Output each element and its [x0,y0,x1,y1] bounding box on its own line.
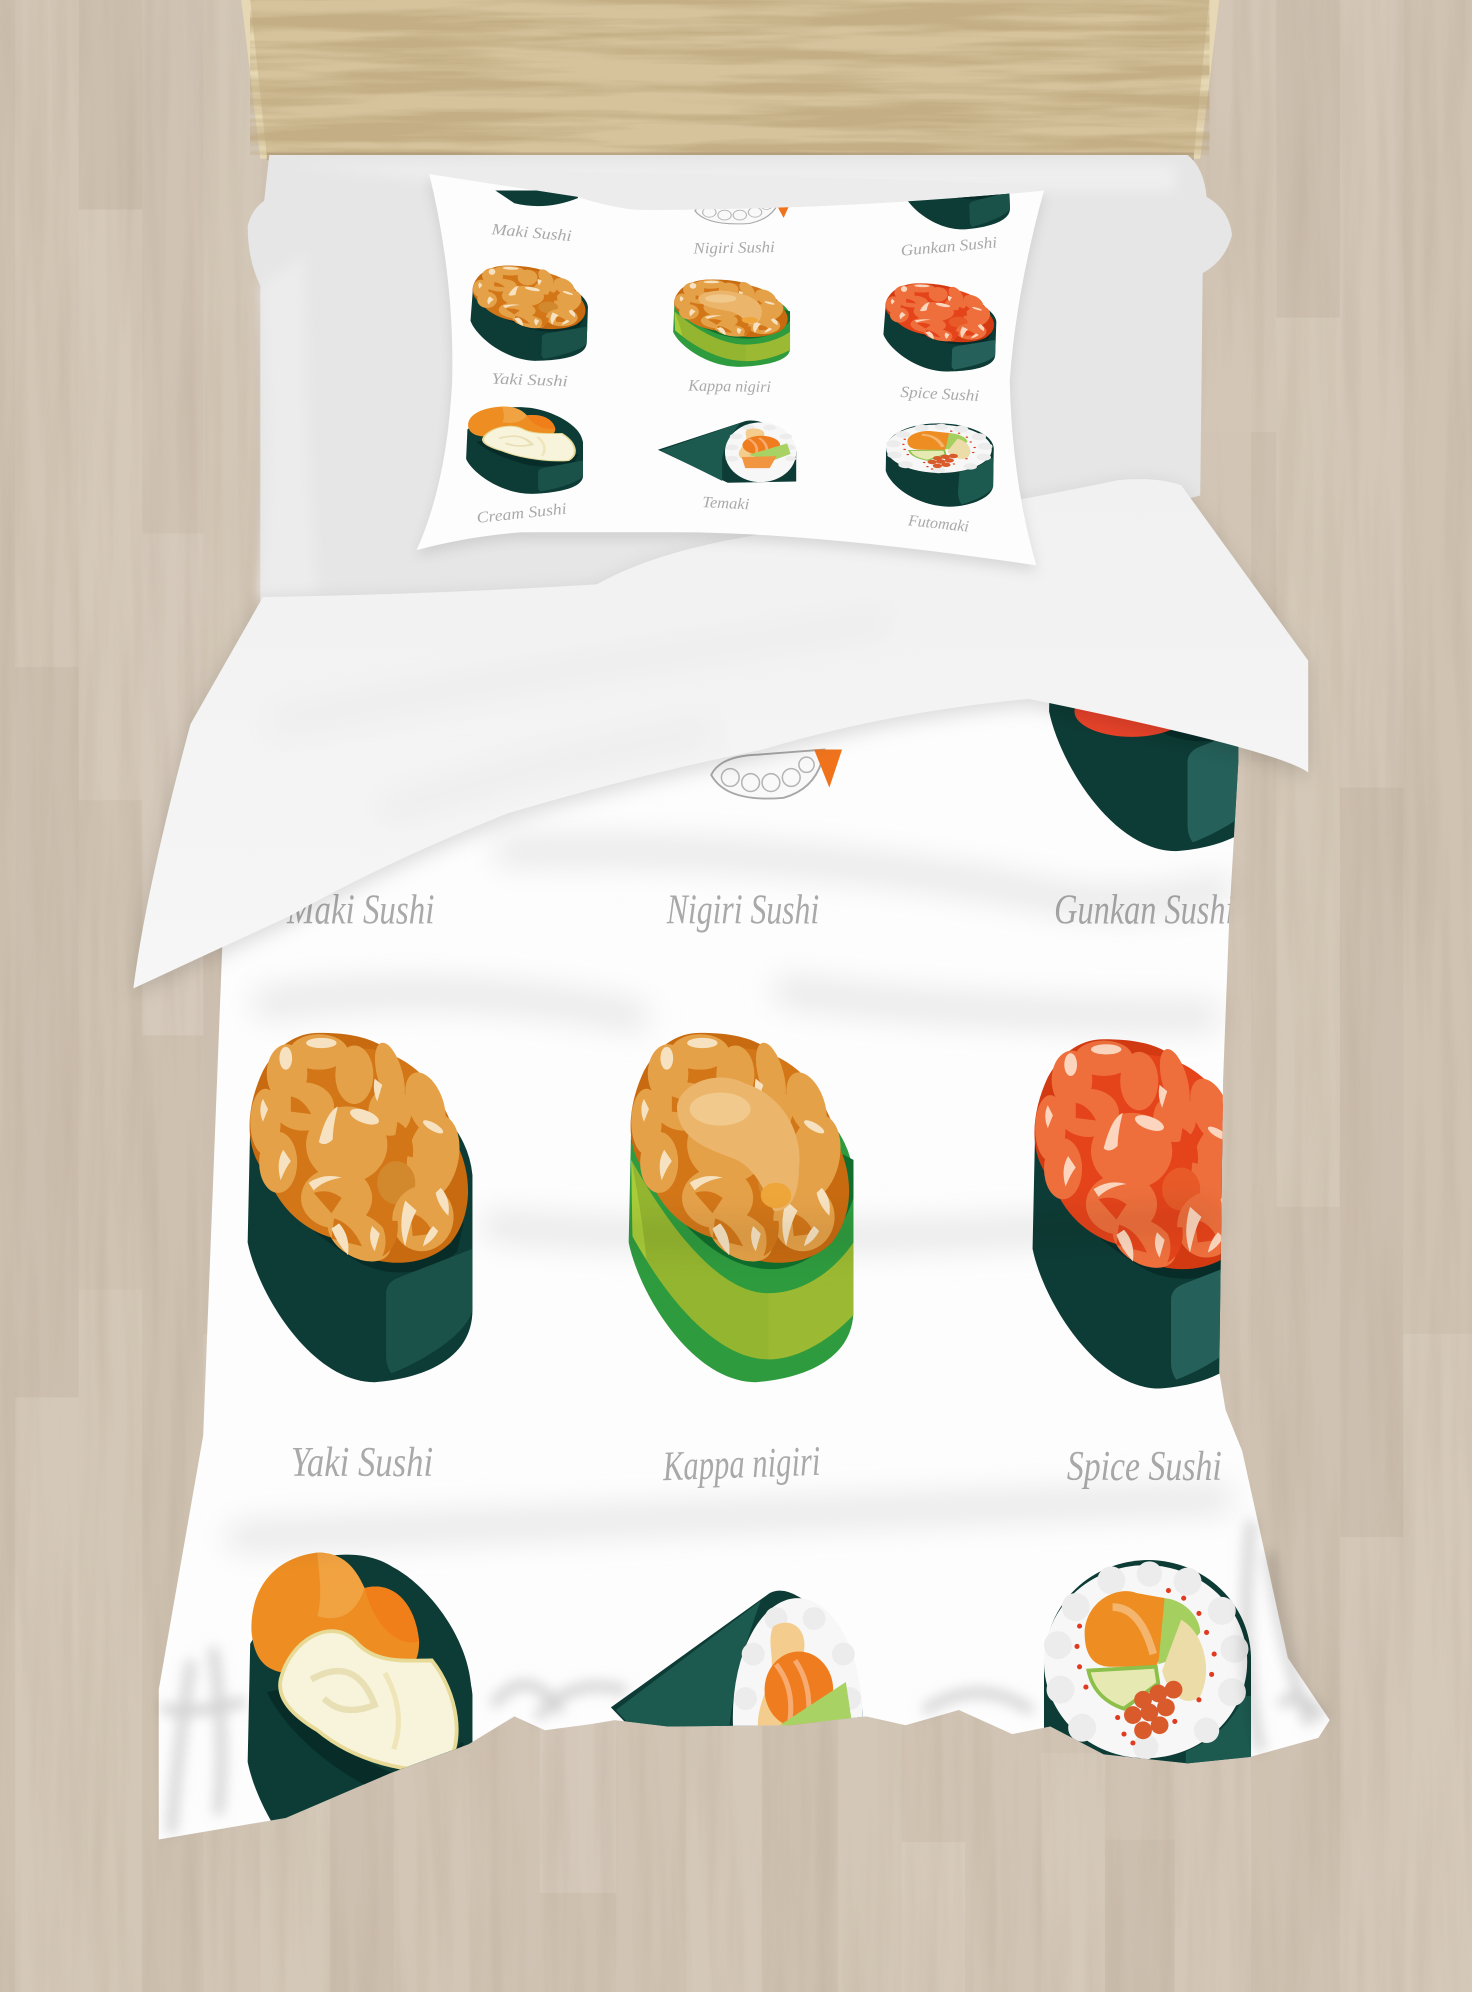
sushi: spice [1032,1039,1223,1388]
mattress and under sheet [248,155,1232,610]
pillow sushi: maki [495,191,578,206]
pillow label: Maki Sushi: Maki Sushi [490,221,572,245]
pillow label: Temaki: Temaki [702,494,750,513]
pillow label: Gunkan Sushi: Gunkan Sushi [900,234,998,260]
headboard [241,0,1219,160]
pillow sushi: spice [882,282,998,373]
pillow label: Kappa nigiri: Kappa nigiri [687,378,771,396]
pillow sushi: cream [466,407,583,494]
pillow sushi: futomaki [885,422,994,508]
pillow label: Nigiri Sushi: Nigiri Sushi [692,239,775,258]
duvet body [158,698,1330,1840]
pillow sushi: temaki [658,421,796,483]
sushi: futomaki [1044,1560,1251,1764]
pillow label: Cream Sushi: Cream Sushi [476,501,567,527]
sushi: temaki [611,1590,862,1726]
pillow label: Futomaki: Futomaki [906,512,970,536]
pillow sushi: yaki [469,264,589,363]
pillow label: Yaki Sushi: Yaki Sushi [491,371,568,390]
label: Gunkan Sushi: Gunkan Sushi [1054,888,1234,934]
label: Spice Sushi: Spice Sushi [1067,1444,1222,1490]
label: Yaki Sushi: Yaki Sushi [291,1440,433,1486]
duvet wrinkles [165,850,1321,1829]
sushi: nigiri fragment [711,750,842,799]
pillow label: Spice Sushi: Spice Sushi [900,384,980,405]
sushi: kappa nigiri [629,1033,853,1382]
duvet print: sushi and labels [248,538,1274,1902]
label: Nigiri Sushi: Nigiri Sushi [666,888,819,934]
label: Kappa nigiri: Kappa nigiri [661,1439,821,1490]
pillow sushi: gunkan [902,143,1011,231]
sushi: cream [248,1552,472,1820]
pillow print: sushi and labels [466,190,1010,532]
pillow [417,143,1044,572]
sushi: yaki [248,1033,472,1382]
sushi: gunkan [1049,703,1238,852]
pillow sushi: nigiri [695,197,793,224]
pillow sushi: kappa nigiri [673,279,790,367]
duvet folded flap [133,479,1308,988]
label: Maki Sushi: Maki Sushi [286,888,434,934]
